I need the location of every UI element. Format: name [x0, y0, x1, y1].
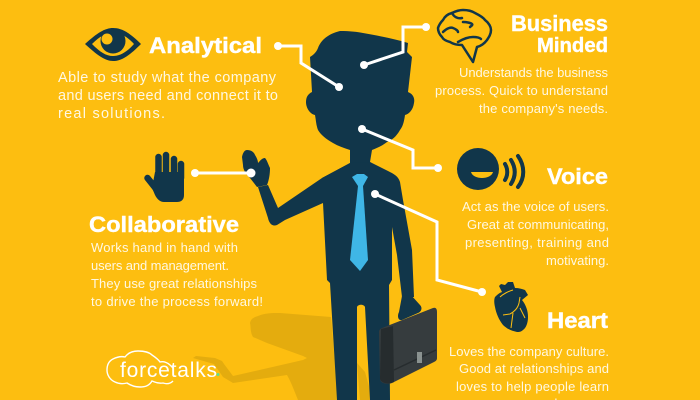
suit body and legs — [258, 162, 414, 400]
raised hand — [242, 150, 270, 187]
text: business minded description — [435, 65, 608, 116]
text: analytical description: Able to study what the company — [58, 70, 277, 86]
icon: heart — [494, 282, 528, 332]
connector: voice — [358, 125, 442, 172]
text: heart description — [449, 344, 609, 400]
logo: forcetalks: forcetalks — [120, 359, 217, 382]
connector: analytical — [274, 42, 343, 91]
text: voice description: presenting, training and — [465, 235, 609, 250]
text: analytical description: real solutions. — [58, 106, 165, 122]
text: collaborative description: Works hand in hand with — [91, 240, 238, 255]
gripping hand — [398, 295, 421, 320]
text: collaborative description: They use great relationships — [91, 276, 258, 291]
head and neck — [306, 31, 414, 180]
heading: Business Minded: Minded — [537, 35, 608, 57]
heading: Heart: Heart — [547, 308, 609, 333]
text: heart description: Good at relationships and — [459, 361, 609, 376]
heading: Business Minded: Business — [511, 11, 608, 36]
text: analytical description: and users need and connect it to — [58, 88, 278, 104]
text: business minded description: Understands the business — [459, 65, 608, 80]
businessman figure — [242, 31, 421, 400]
text: heart description: Loves the company culture. — [449, 344, 609, 359]
connector: business minded — [360, 23, 430, 69]
heading: Collaborative: Collaborative — [89, 212, 239, 237]
connector: heart — [371, 190, 486, 296]
text: collaborative description: to drive the process forward! — [91, 294, 263, 309]
text: voice description: Great at communicating, — [467, 217, 609, 232]
heading: Business Minded — [511, 11, 608, 57]
text: collaborative description: users and management. — [91, 258, 229, 273]
text: business minded description: the company's needs. — [479, 101, 608, 116]
figure shadow — [193, 313, 370, 400]
icon: voice — [457, 148, 523, 190]
heading: Analytical: Analytical — [149, 33, 262, 58]
text: collaborative description — [91, 240, 263, 309]
connector: collaborative — [191, 168, 256, 178]
text: voice description: motivating. — [546, 253, 609, 268]
text: analytical description — [58, 70, 278, 122]
text: business minded description: process. Quick to understand — [435, 83, 608, 98]
text: heart description: loves to help people learn — [456, 379, 609, 394]
logo: forcetalks — [107, 351, 220, 387]
briefcase — [379, 308, 437, 384]
text: voice description: Act as the voice of users. — [462, 199, 609, 214]
icon: hand — [148, 155, 184, 202]
icon: brain — [438, 10, 491, 62]
text: voice description — [462, 199, 609, 268]
icon: eye — [85, 28, 141, 61]
heading: Voice: Voice — [547, 164, 608, 189]
tie — [350, 174, 368, 271]
